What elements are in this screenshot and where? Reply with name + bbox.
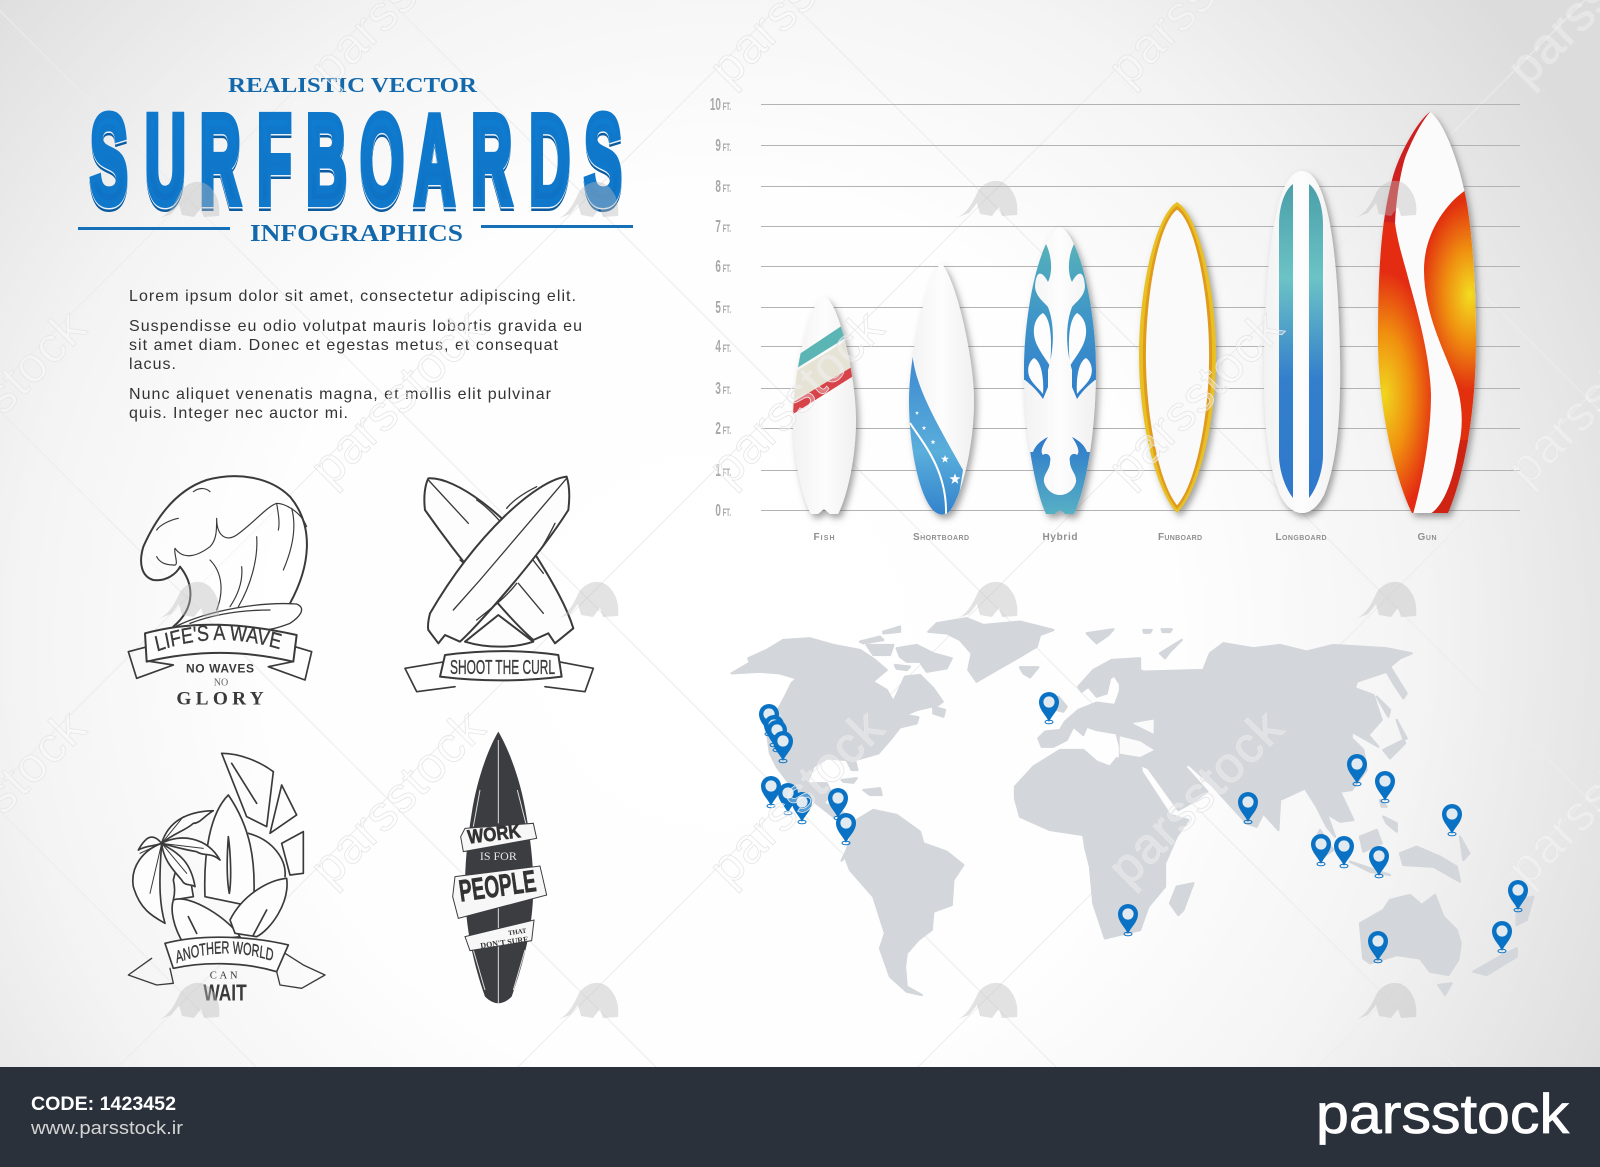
tagline: CAN [210, 970, 240, 981]
watermark: parsstock text: parsstock [1097, 699, 1294, 896]
banner: work [461, 823, 537, 852]
heading: surfboards: SURFBOARDS [90, 91, 622, 232]
emblem: work is for people [453, 732, 547, 1003]
banner: that don't surf [465, 920, 534, 951]
axis labels [710, 95, 731, 521]
tagline: WAIT [203, 980, 247, 1006]
landmasses: asia, oceania [1120, 629, 1533, 995]
axis labels: 9 FT. [715, 136, 731, 156]
code: CODE: 1423452 [31, 1094, 176, 1115]
board details [473, 740, 527, 1003]
front boards [172, 899, 240, 943]
banner [145, 625, 297, 662]
banner: people [453, 866, 547, 918]
surfboard: funboard [1139, 202, 1216, 513]
inland seas [1120, 720, 1153, 757]
axis labels: 10 FT. [710, 95, 731, 115]
heading: surfboards: SURFBOARDS [90, 90, 622, 230]
banner text: LIFE'S A WAVE [154, 626, 282, 652]
emblem: shoot the curl [405, 477, 593, 692]
label: work: WORK [466, 821, 522, 849]
banner text: SHOOT THE CURL [450, 657, 555, 679]
board names: Shortboard [913, 532, 969, 543]
intro text: Suspendisse eu odio volutpat mauris lobortis gravida eu [129, 318, 582, 335]
intro text: quis. Integer nec auctor mi. [129, 405, 348, 422]
heading: realistic vector: REALISTIC VECTOR [228, 73, 478, 97]
emblem: another world can wait [128, 752, 326, 1006]
bar chart: surfboard sizes [710, 95, 1520, 543]
tagline: GLORY [176, 689, 264, 710]
surfboard: shortboard [900, 263, 974, 520]
rule left [78, 227, 230, 230]
tagline [176, 662, 264, 710]
axis labels: 2 FT. [715, 419, 731, 439]
watermark: parsstock text: parsstock [299, 699, 496, 896]
heading: infographics: INFOGRAPHICS [250, 221, 463, 247]
background boards [222, 753, 303, 875]
emblem: work is for people: DON'T SURF [480, 935, 529, 950]
label: that don't surf: THAT [508, 928, 527, 937]
board names: Fish [814, 532, 834, 543]
surfboard: fish [790, 297, 856, 514]
intro text: Nunc aliquet venenatis magna, et mollis elit pulvinar [129, 386, 552, 403]
board A [424, 478, 573, 643]
world map [732, 618, 1533, 995]
surfboard: hybrid [1015, 227, 1105, 520]
intro text: Lorem ipsum dolor sit amet, consectetur adipiscing elit. [129, 288, 576, 305]
title block [78, 73, 633, 247]
grid lines [761, 104, 1520, 510]
intro text [129, 288, 582, 422]
tagline: NO [214, 677, 228, 688]
axis labels: 0 FT. [715, 501, 731, 521]
banner [405, 662, 593, 692]
board names: Longboard [1276, 532, 1326, 543]
banner [128, 953, 325, 988]
wave outline [141, 476, 307, 627]
watermark: parsstock text: parsstock [1097, 299, 1294, 496]
axis labels: 3 FT. [715, 379, 731, 399]
tagline: NO WAVES [186, 662, 254, 676]
board names: Hybrid [1042, 532, 1078, 543]
footer bar [0, 1067, 1600, 1167]
watermark: parsstock text: parsstock [299, 299, 496, 496]
watermark: bull icons [158, 181, 1416, 1020]
axis labels: 1 FT. [715, 461, 731, 481]
dark board [465, 732, 533, 1003]
board names [814, 532, 1436, 543]
axis labels: 7 FT. [715, 217, 731, 237]
emblem: life's a wave [128, 475, 312, 710]
board names: Funboard [1158, 532, 1202, 543]
axis labels: 6 FT. [715, 257, 731, 277]
landmasses: americas, europe, africa [732, 618, 1188, 995]
rule right [481, 225, 633, 228]
board names: Gun [1418, 532, 1436, 543]
surfboard under wave [177, 604, 302, 630]
label: people: PEOPLE [457, 864, 538, 909]
board B [428, 477, 569, 643]
heading: surfboards: SURFBOARDS [90, 94, 622, 234]
tagline [203, 970, 247, 1006]
website: www.parsstock.ir [30, 1118, 183, 1138]
label: is for: IS FOR [480, 849, 517, 863]
location pins [759, 692, 1528, 963]
watermark: parsstock text: parsstock [698, 299, 895, 496]
banner text: ANOTHER WORLD [176, 941, 274, 964]
axis labels: 8 FT. [715, 177, 731, 197]
centre board [205, 795, 254, 907]
axis labels: 5 FT. [715, 298, 731, 318]
palm tree [173, 864, 193, 900]
surfboard: longboard [1264, 171, 1340, 513]
axis labels: 4 FT. [715, 337, 731, 357]
watermark: parsstock text [0, 0, 1600, 896]
logo: parsstock [1316, 1082, 1570, 1145]
triangle [465, 615, 533, 647]
surfboard: gun [1370, 105, 1485, 514]
intro text: lacus. [129, 356, 176, 373]
watermark: parsstock text: parsstock [698, 699, 895, 896]
intro text: sit amet diam. Donec et egestas metus, et consequat [129, 337, 559, 354]
